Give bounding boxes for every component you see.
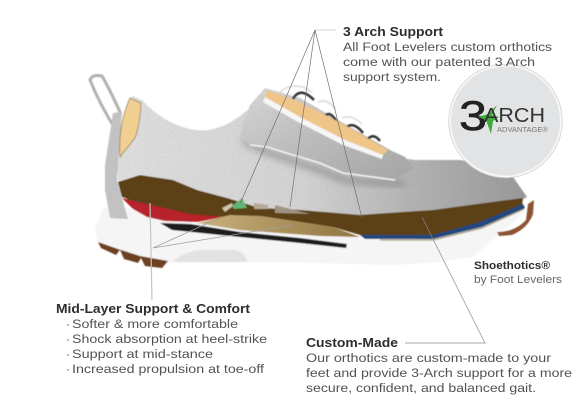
text: custom-made: feet and provide 3-Arch support for a more — [306, 366, 572, 380]
tan toe edge — [380, 209, 524, 240]
tan arch layer — [197, 215, 360, 237]
text: 3 arch support — [343, 24, 552, 84]
heel spine — [105, 112, 128, 219]
leader lines: mid-layer — [150, 203, 293, 300]
text: custom-made: Our orthotics are custom-made to your — [306, 351, 551, 365]
insole brown — [118, 175, 523, 236]
red heel layer — [122, 198, 223, 222]
black base line — [160, 223, 347, 248]
text: mid-layer support: · — [66, 362, 70, 376]
text: mid-layer support: · — [66, 332, 70, 346]
laces — [293, 93, 380, 141]
white strip — [263, 97, 383, 159]
text: mid-layer support — [56, 301, 267, 376]
leader lines: custom-made — [405, 217, 485, 343]
text: custom-made: secure, confident, and balanced gait. — [306, 381, 536, 395]
text: mid-layer support: Support at mid-stance — [72, 347, 213, 361]
shoe illustration — [90, 76, 534, 268]
text: mid-layer support: Shock absorption at heel-strike — [72, 332, 267, 346]
blue layer — [360, 204, 525, 239]
logo star — [478, 105, 499, 134]
text: 3 arch support: 3 Arch Support — [343, 24, 444, 39]
dark mid layer — [122, 196, 230, 222]
tongue flap — [240, 88, 414, 180]
text: mid-layer support: · — [66, 317, 70, 331]
flap shadow — [243, 140, 405, 184]
text: shoethotics: by Foot Levelers — [474, 274, 563, 286]
pull tab loop — [90, 76, 120, 130]
text: shoethotics: Shoethotics® — [474, 260, 550, 272]
3 arch advantage badge — [449, 64, 562, 178]
arch logos on insole — [222, 198, 310, 214]
text: custom-made: Custom-Made — [306, 335, 398, 350]
toe tread — [497, 200, 534, 236]
midsole cutout — [173, 250, 247, 262]
white outsole — [95, 205, 527, 265]
flap white edge — [250, 145, 395, 180]
text: custom-made — [306, 335, 572, 395]
logo text: ARCH — [484, 105, 545, 127]
upper — [118, 96, 527, 216]
text: mid-layer support: Softer & more comfortable — [72, 317, 238, 331]
heel tread — [98, 242, 168, 268]
logo numeral: 3 — [459, 92, 487, 139]
text: mid-layer support: Increased propulsion at toe-off — [72, 362, 265, 376]
text: shoethotics — [474, 260, 563, 286]
text: 3 arch support: come with our patented 3 Arch — [343, 55, 535, 69]
3 arch advantage badge: ADVANTAGE® — [497, 126, 549, 134]
text: 3 arch support: support system. — [343, 70, 441, 84]
text: 3 arch support: All Foot Levelers custom orthotics — [343, 40, 552, 54]
orange foam strip — [265, 90, 388, 155]
text: mid-layer support: · — [66, 347, 70, 361]
leader lines: 3 arch support — [240, 30, 362, 218]
text: mid-layer support: Mid-Layer Support & Comfort — [56, 301, 251, 316]
heel foam — [120, 98, 141, 157]
